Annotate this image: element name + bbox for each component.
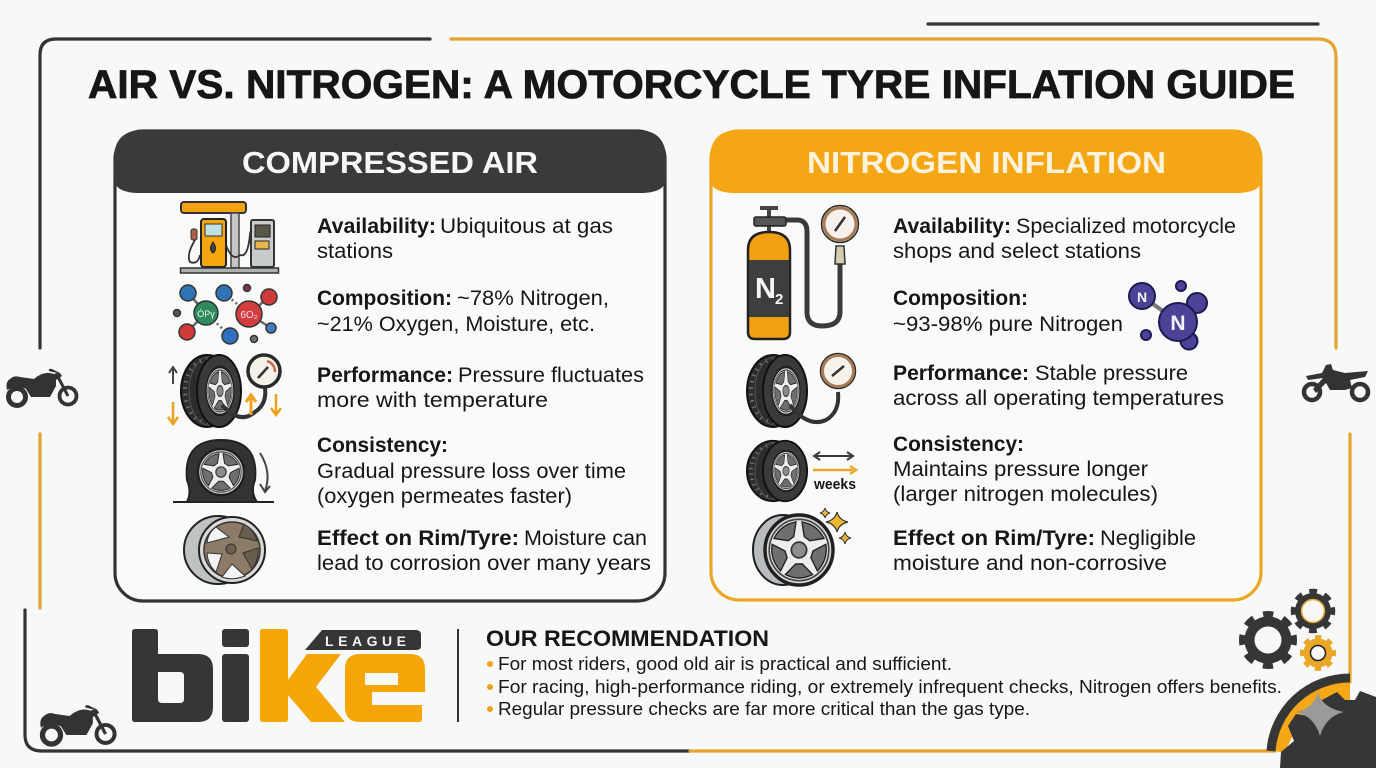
icon: nitrogen molecule bbox=[1129, 281, 1207, 350]
text: compressed air rows: Pressure fluctuates bbox=[458, 364, 644, 387]
recommendation bullets: For racing, high-performance riding, or extremely infrequent checks, Nitrogen offers benefits. bbox=[498, 676, 1282, 697]
icon: gas pump bbox=[180, 202, 278, 273]
icon: gears bbox=[1242, 592, 1334, 668]
icon: motorcycle right bbox=[1304, 364, 1368, 400]
text: compressed air rows: Consistency: bbox=[317, 434, 448, 457]
text: compressed air rows: Performance: bbox=[317, 364, 453, 387]
text: nitrogen rows: Composition: bbox=[893, 287, 1028, 310]
icon: corner gear bbox=[1271, 678, 1376, 768]
panel: compressed air bbox=[115, 131, 665, 601]
icon: nitrogen cylinder with gauge: N bbox=[755, 273, 776, 305]
text: nitrogen rows: Stable pressure bbox=[1035, 362, 1188, 385]
icon: nitrogen cylinder with gauge: 2 bbox=[775, 291, 783, 308]
icon: tyre with weeks arrows: weeks bbox=[813, 476, 856, 493]
text: compressed air rows bbox=[317, 215, 651, 575]
text: compressed air rows: Gradual pressure loss over time bbox=[317, 460, 626, 483]
icon: tyre with gauge and arrows bbox=[168, 355, 281, 427]
icon: air molecules bbox=[174, 284, 277, 344]
icon: air molecules: ÓPγ bbox=[197, 309, 215, 319]
text: compressed air rows: lead to corrosion over many years bbox=[317, 552, 651, 575]
icon: clean rim with sparkles bbox=[753, 508, 851, 585]
text: compressed air rows: stations bbox=[317, 240, 393, 263]
icon: nitrogen cylinder with gauge bbox=[748, 206, 858, 339]
icon: tyre with gauge bbox=[747, 354, 856, 427]
icon: motorcycle left bbox=[6, 369, 76, 406]
icon: corroded rim bbox=[184, 516, 265, 584]
panel heading: nitrogen inflation bbox=[711, 131, 1261, 192]
text: nitrogen rows: Availability: bbox=[893, 215, 1011, 238]
text: compressed air rows: (oxygen permeates faster) bbox=[317, 485, 572, 508]
text: compressed air rows: ~78% Nitrogen, bbox=[457, 287, 609, 310]
text: nitrogen rows: Performance: bbox=[893, 362, 1029, 385]
title: AIR VS. NITROGEN: A MOTORCYCLE TYRE INFLATION GUIDE bbox=[88, 63, 1295, 107]
recommendation block bbox=[486, 626, 1282, 719]
text: compressed air rows: Effect on Rim/Tyre: bbox=[317, 527, 519, 550]
recommendation bullets: For most riders, good old air is practical and sufficient. bbox=[498, 653, 952, 674]
text: compressed air rows: Ubiquitous at gas bbox=[440, 215, 613, 238]
panel heading: compressed air bbox=[115, 131, 665, 192]
panel heading: compressed air: COMPRESSED AIR bbox=[242, 145, 538, 180]
panel heading: nitrogen inflation: NITROGEN INFLATION bbox=[807, 145, 1166, 180]
logo: bike league: LEAGUE bbox=[325, 633, 406, 649]
text: nitrogen rows: across all operating temperatures bbox=[893, 387, 1224, 410]
recommendation bullets: Regular pressure checks are far more critical than the gas type. bbox=[498, 698, 1030, 719]
text: nitrogen rows: (larger nitrogen molecules) bbox=[893, 483, 1158, 506]
text: nitrogen rows: Maintains pressure longer bbox=[893, 458, 1148, 481]
recommendation heading: OUR RECOMMENDATION bbox=[486, 626, 769, 651]
text: compressed air rows: more with temperature bbox=[317, 389, 548, 412]
text: nitrogen rows: shops and select stations bbox=[893, 240, 1141, 263]
text: nitrogen rows: Specialized motorcycle bbox=[1016, 215, 1236, 238]
divider bbox=[457, 629, 459, 722]
icon: flat tyre bbox=[173, 440, 274, 502]
text: compressed air rows: Availability: bbox=[317, 215, 436, 238]
text: nitrogen rows: Consistency: bbox=[893, 433, 1024, 456]
text: nitrogen rows: moisture and non-corrosive bbox=[893, 552, 1167, 575]
icon: nitrogen molecule: N bbox=[1170, 312, 1186, 335]
icon: air molecules: 6O₂ bbox=[240, 310, 258, 321]
icon: tyre with weeks arrows bbox=[747, 441, 856, 501]
logo: bike league bbox=[132, 629, 425, 722]
icon: nitrogen molecule: N bbox=[1137, 289, 1147, 305]
text: nitrogen rows: Effect on Rim/Tyre: bbox=[893, 527, 1095, 550]
text: compressed air rows: Composition: bbox=[317, 287, 452, 310]
text: compressed air rows: Moisture can bbox=[524, 527, 647, 550]
icon: motorcycle bottom left bbox=[40, 705, 115, 744]
panel: nitrogen inflation bbox=[711, 131, 1261, 600]
recommendation bullets bbox=[487, 653, 1282, 719]
text: nitrogen rows bbox=[893, 215, 1236, 575]
text: nitrogen rows: ~93-98% pure Nitrogen bbox=[893, 313, 1123, 336]
text: compressed air rows: ~21% Oxygen, Moisture, etc. bbox=[317, 313, 595, 336]
text: nitrogen rows: Negligible bbox=[1100, 527, 1196, 550]
